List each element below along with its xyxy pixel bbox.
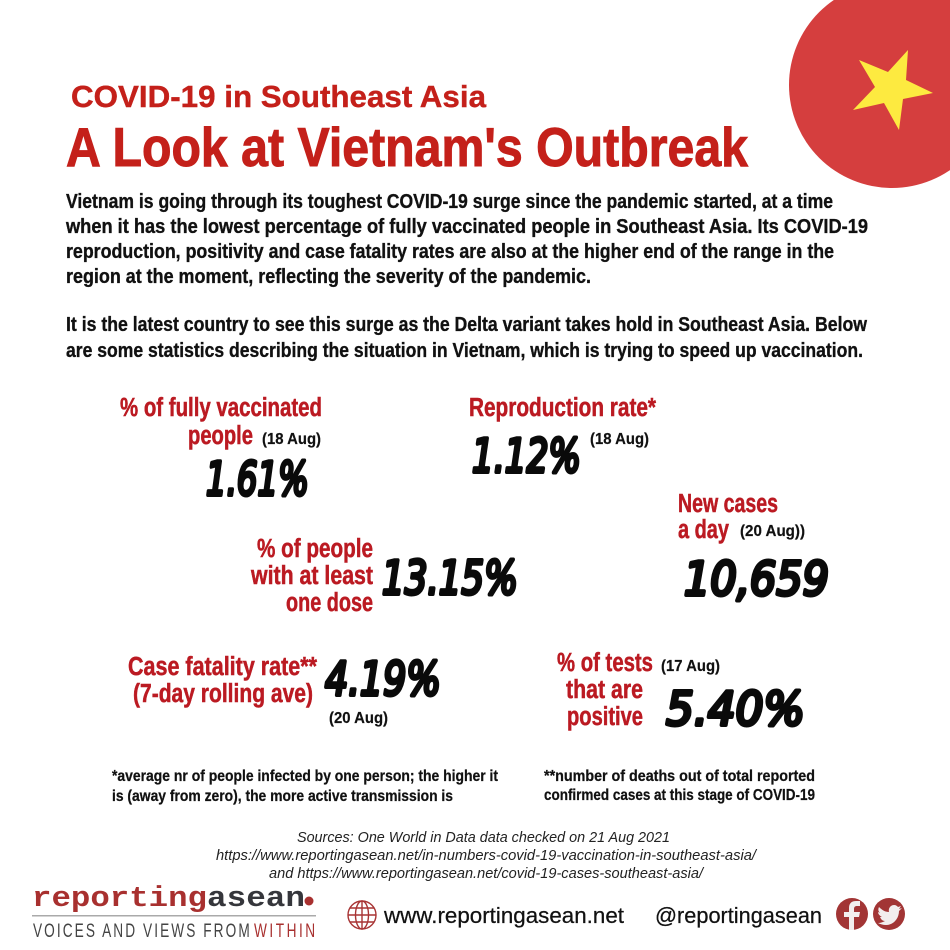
panel: at least one dose: % of people <box>257 535 373 563</box>
icon: Vietnam flag circle <box>789 0 950 188</box>
panel: fully vaccinated: % of fully vaccinated <box>120 394 322 422</box>
panel: fully vaccinated: people <box>188 422 253 450</box>
footnote: reproduction rate <box>112 768 498 805</box>
text block: introduction: region at the moment, reflecting the severity of the pandemic. <box>66 266 591 288</box>
text block: introduction: reproduction, positivity and case fatality rates are also at the higher end of the range in the <box>66 241 834 263</box>
logo: Reporting ASEAN: WITHIN <box>254 920 315 942</box>
panel: at least one dose: 13.15% <box>382 551 518 605</box>
panel: fully vaccinated <box>120 394 322 506</box>
text block: introduction: Vietnam is going through its toughest COVID-19 surge since the pandemic started, at a time <box>66 191 833 213</box>
text block: sources: Sources: One World in Data data checked on 21 Aug 2021 <box>297 830 670 846</box>
footnote: case fatality rate: confirmed cases at this stage of COVID-19 <box>544 787 815 804</box>
panel: case fatality rate: (7-day rolling ave) <box>133 680 313 708</box>
text: website: www.reportingasean.net <box>383 903 624 928</box>
footnote: case fatality rate: **number of deaths out of total reported <box>544 768 815 785</box>
panel: positive tests: 5.40% <box>666 682 805 736</box>
panel: positive tests: % of tests <box>557 649 653 677</box>
panel: fully vaccinated: 1.61% <box>206 452 309 506</box>
panel: reproduction rate: (18 Aug) <box>590 431 649 448</box>
footnote: reproduction rate: *average nr of people infected by one person; the higher it <box>112 768 498 785</box>
text block: sources <box>216 830 758 882</box>
panel: at least one dose: with at least <box>250 562 373 590</box>
text block: introduction: It is the latest country to see this surge as the Delta variant takes hold in Southeast Asia. Below <box>66 314 867 336</box>
panel: new cases <box>678 490 829 606</box>
panel: new cases: 10,659 <box>684 552 829 606</box>
logo: Reporting ASEAN: asean <box>207 882 305 915</box>
title: A Look at Vietnam's Outbreak <box>66 116 748 178</box>
panel: positive tests <box>557 649 805 736</box>
panel: reproduction rate <box>469 394 656 483</box>
panel: positive tests: (17 Aug) <box>661 658 720 675</box>
panel: new cases: New cases <box>678 490 778 518</box>
panel: case fatality rate <box>128 652 441 727</box>
panel: positive tests: positive <box>567 703 643 731</box>
panel: fully vaccinated: (18 Aug) <box>262 431 321 448</box>
footnote: case fatality rate <box>544 768 815 804</box>
icon: twitter <box>873 898 905 930</box>
panel: reproduction rate: Reproduction rate* <box>469 394 656 422</box>
text block: introduction: when it has the lowest percentage of fully vaccinated people in Southeast Asia. Its COVID-19 <box>65 216 868 238</box>
panel: new cases: (20 Aug)) <box>740 523 805 540</box>
panel: case fatality rate: 4.19% <box>325 652 441 706</box>
panel: case fatality rate: (20 Aug) <box>329 710 388 727</box>
text: social handle: @reportingasean <box>655 903 822 928</box>
text block: sources: https://www.reportingasean.net/in-numbers-covid-19-vaccination-in-southeast-asia/ <box>216 848 758 864</box>
panel: positive tests: that are <box>566 676 643 704</box>
panel: at least one dose <box>250 535 518 617</box>
text block: introduction: are some statistics describing the situation in Vietnam, which is trying to speed up vaccination. <box>66 340 863 362</box>
footnote: reproduction rate: is (away from zero), the more active transmission is <box>112 788 453 805</box>
panel: at least one dose: one dose <box>286 589 373 617</box>
icon: globe <box>348 901 376 929</box>
heading: subtitle: COVID-19 in Southeast Asia <box>71 79 487 114</box>
logo: Reporting ASEAN <box>32 882 316 942</box>
logo: Reporting ASEAN: reporting <box>32 882 207 915</box>
logo: Reporting ASEAN: VOICES AND VIEWS FROM <box>33 920 250 942</box>
text block: sources: and https://www.reportingasean.net/covid-19-cases-southeast-asia/ <box>269 866 705 882</box>
text block: introduction <box>65 191 868 362</box>
panel: case fatality rate: Case fatality rate** <box>128 653 317 681</box>
panel: new cases: a day <box>678 516 730 544</box>
icon: facebook <box>836 898 868 930</box>
panel: reproduction rate: 1.12% <box>472 429 581 483</box>
